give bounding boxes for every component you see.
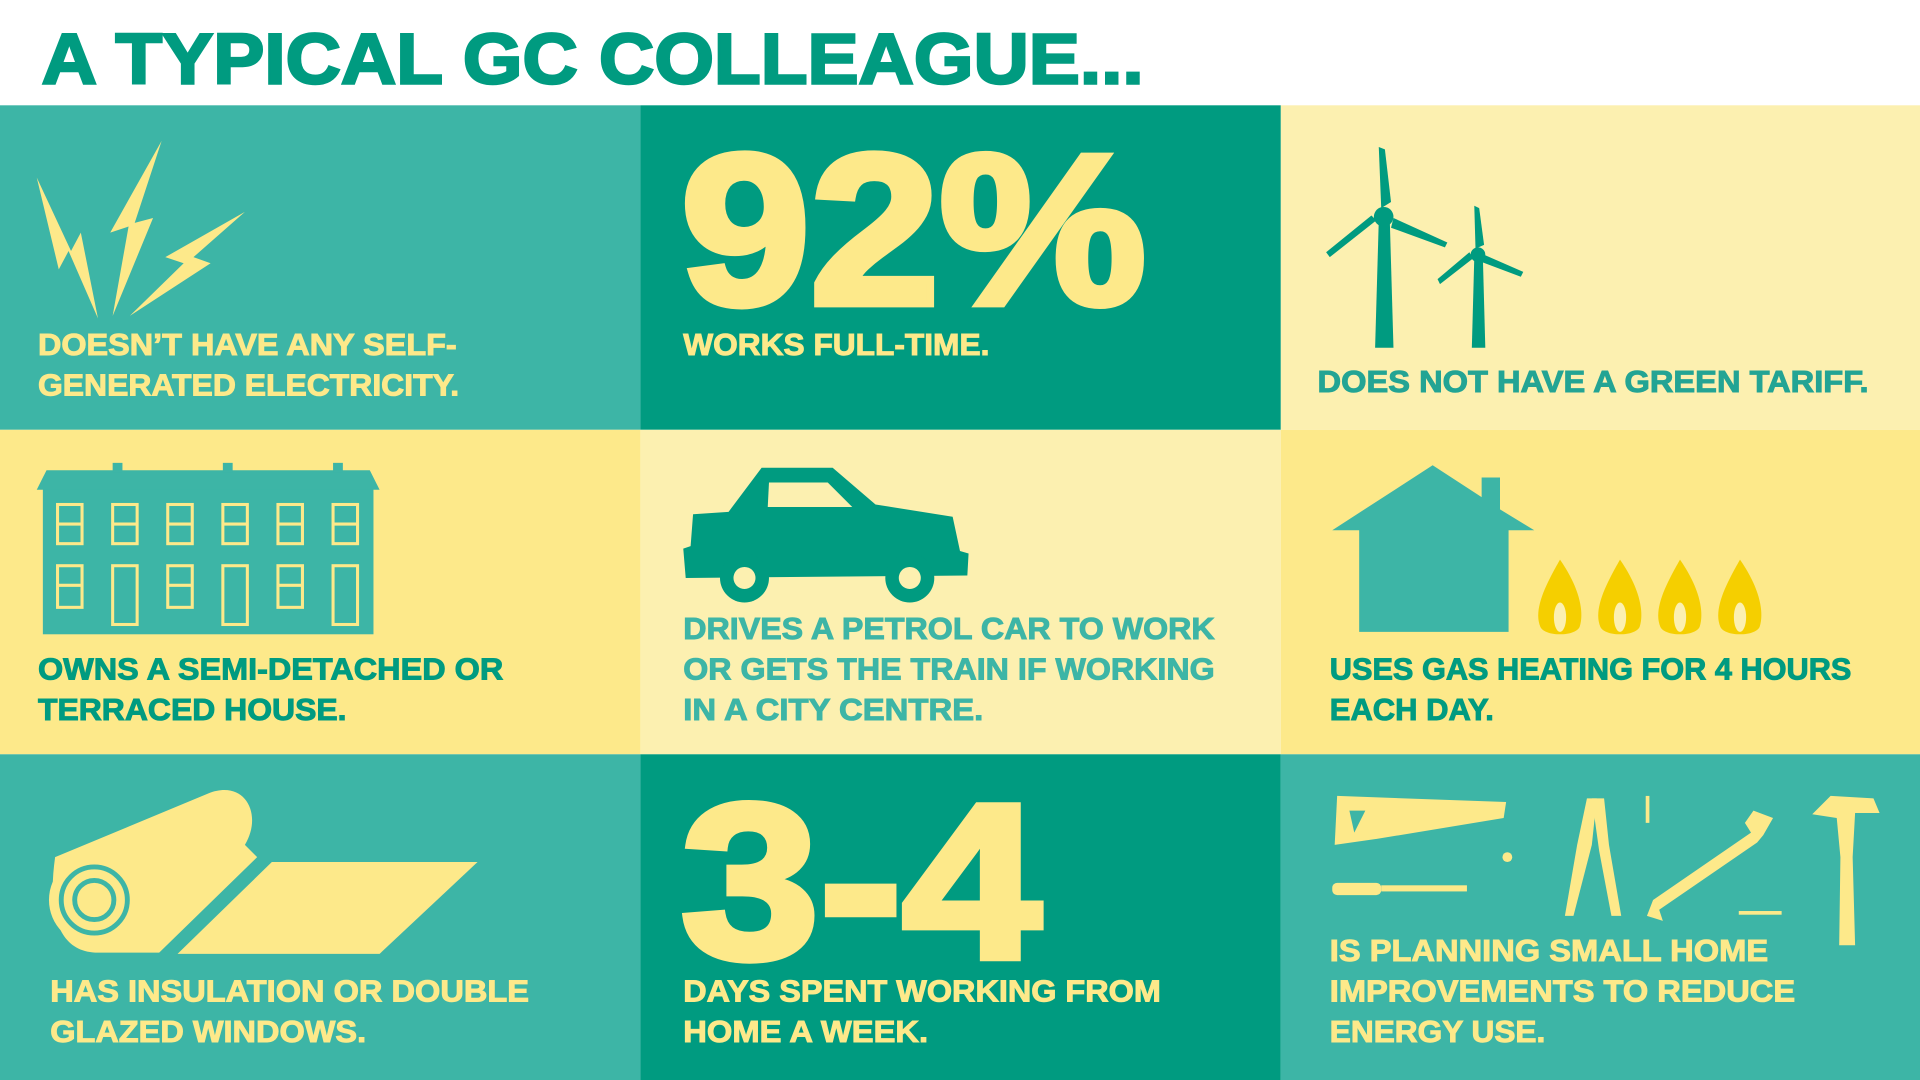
panel: green tariff [1281,105,1920,430]
icon: tools [1332,796,1880,945]
caption: HAS INSULATION OR DOUBLE [50,975,529,1009]
caption [1330,653,1851,727]
panel: insulation [0,754,640,1080]
caption: EACH DAY. [1330,693,1494,727]
panel: home improvements [1281,754,1920,1080]
caption: WORKS FULL-TIME. [683,328,989,362]
caption [1330,934,1795,1049]
caption: IS PLANNING SMALL HOME [1330,934,1768,968]
caption [50,975,529,1049]
big number: 3-4 [681,758,1041,1005]
panel: gas heating [1281,430,1920,754]
caption: USES GAS HEATING FOR 4 HOURS [1330,653,1851,687]
panel: working from home [640,754,1281,1080]
icon: car [683,468,969,602]
caption: OWNS A SEMI-DETACHED OR [38,653,503,687]
caption: DRIVES A PETROL CAR TO WORK [683,612,1215,646]
icon: flames [1538,560,1761,634]
caption [683,975,1161,1049]
icon: wind turbines [1326,147,1523,348]
panel: commute [640,430,1281,754]
caption: OR GETS THE TRAIN IF WORKING [683,653,1215,687]
panel: 92% full-time [640,105,1281,430]
caption: GENERATED ELECTRICITY. [38,369,459,403]
icon: terraced houses [37,463,380,634]
caption [38,328,459,403]
caption [683,612,1215,727]
caption: HOME A WEEK. [683,1015,928,1049]
caption: TERRACED HOUSE. [38,693,347,727]
caption [38,653,503,727]
panel: self-generated electricity [0,105,640,430]
caption: DOESN’T HAVE ANY SELF- [38,328,457,362]
caption: IN A CITY CENTRE. [683,693,983,727]
caption: DAYS SPENT WORKING FROM [683,975,1161,1009]
big number: 92% [681,111,1146,350]
caption: ENERGY USE. [1330,1015,1545,1049]
caption: GLAZED WINDOWS. [50,1015,366,1049]
icon: house [1332,465,1534,632]
panel: house type [0,430,640,754]
icon: insulation roll [49,790,478,954]
caption: DOES NOT HAVE A GREEN TARIFF. [1318,365,1869,399]
caption: IMPROVEMENTS TO REDUCE [1330,975,1795,1009]
icon: lightning bolts [37,141,245,318]
title: A TYPICAL GC COLLEAGUE... [42,20,1144,99]
